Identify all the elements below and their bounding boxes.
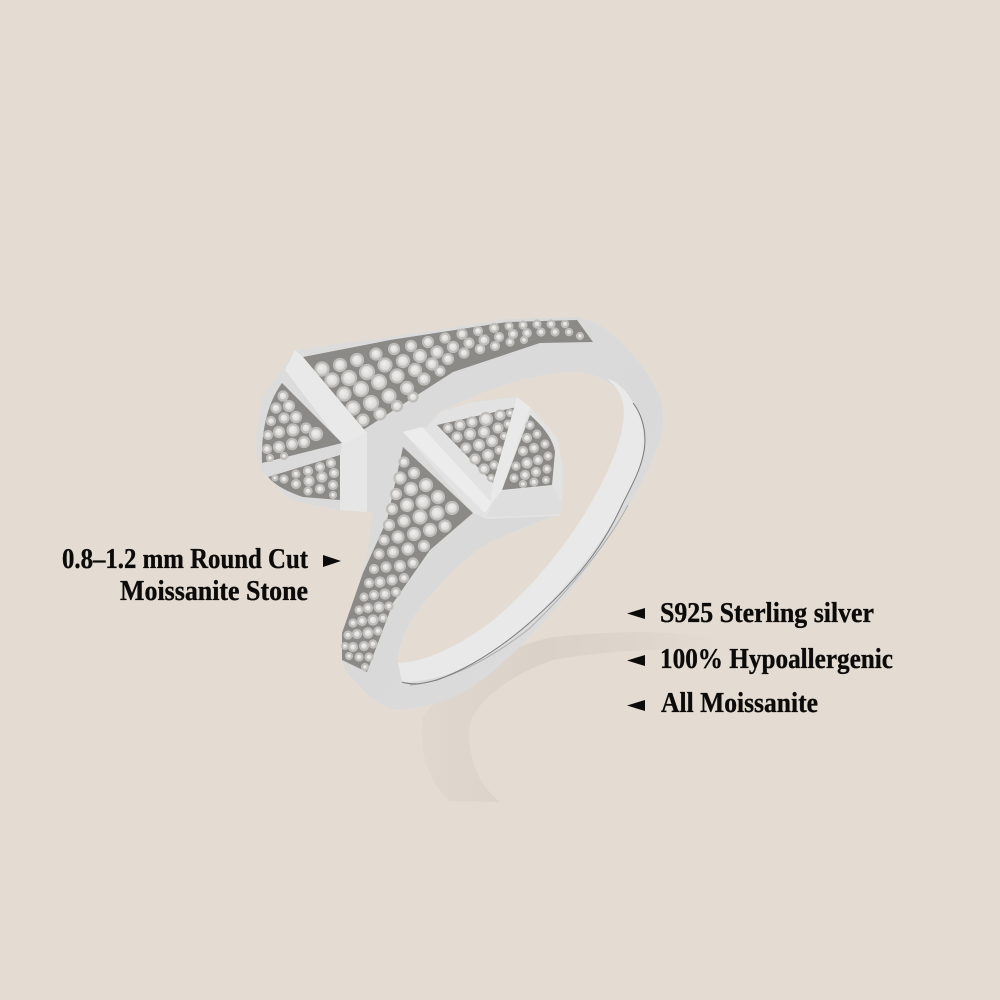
label text line two: Moissanite Stone [120, 576, 308, 607]
band groove second line [410, 505, 628, 685]
label text: 100% Hypoallergenic [660, 644, 893, 675]
upper arm pave panel [303, 320, 593, 430]
lower arm [342, 447, 473, 672]
right head upper pave base [437, 407, 517, 483]
ring band silhouette [255, 317, 663, 709]
lower arm pave base [342, 447, 473, 672]
right head side stones [510, 422, 552, 487]
band groove lines [402, 403, 645, 684]
left head [262, 383, 342, 500]
right head lower bar [487, 486, 562, 517]
upper pave base [303, 320, 593, 430]
left head upper pave base [262, 383, 342, 463]
arrow left [627, 700, 645, 711]
right head silver divider bar [403, 427, 492, 513]
callout: round cut moissanite stone [62, 544, 341, 607]
label text: All Moissanite [661, 688, 818, 719]
arrow right [323, 555, 341, 567]
right head silver body [403, 397, 563, 519]
lower arm stones [342, 458, 458, 670]
inner band surface [398, 378, 644, 682]
left head silver edge highlight [340, 433, 367, 512]
upper arm silver divider bar [285, 350, 367, 445]
right head side pave base [502, 415, 555, 490]
ring shadow [422, 632, 720, 802]
left head upper stones [263, 392, 322, 461]
left head lower pave base [268, 455, 340, 500]
callout: sterling silver [627, 598, 874, 629]
upper pave stones [316, 320, 583, 426]
label text line one: 0.8–1.2 mm Round Cut [62, 544, 309, 575]
callout: all moissanite [627, 688, 818, 719]
label text: S925 Sterling silver [660, 598, 874, 629]
left head lower stones [272, 459, 338, 498]
ring illustration [255, 317, 663, 709]
right head upper stones [444, 410, 513, 481]
right head vertical divider [490, 397, 530, 505]
arrow left [627, 608, 645, 619]
arrow left [627, 655, 645, 666]
callout: hypoallergenic [627, 644, 893, 675]
right head [403, 397, 562, 517]
